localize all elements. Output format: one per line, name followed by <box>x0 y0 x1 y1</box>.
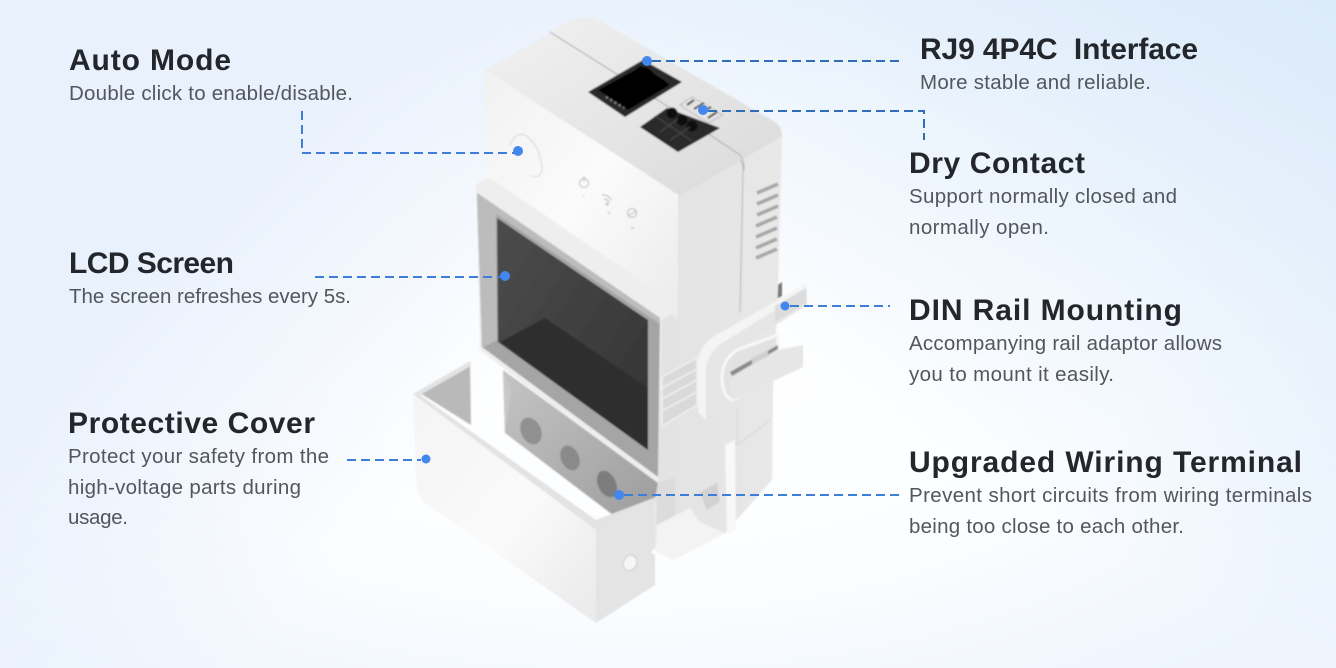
callout: Protective Cover <box>68 407 430 529</box>
rear rail tabs <box>775 282 782 300</box>
callout: Dry Contact: Dry Contact <box>909 147 1085 180</box>
screen frame <box>476 178 678 488</box>
callout: RJ9 4P4C Interface: RJ9 4P4C Interface <box>920 33 1198 66</box>
callout: Upgraded Wiring Terminal: Prevent short circuits from wiring terminals <box>909 484 1312 507</box>
front face <box>485 70 678 320</box>
callout: LCD Screen: LCD Screen <box>69 247 234 280</box>
callout: Auto Mode: Double click to enable/disable. <box>69 82 353 105</box>
callout: DIN Rail Mounting: you to mount it easily. <box>909 363 1114 386</box>
right side and lower body <box>655 130 782 560</box>
callout: LCD Screen: The screen refreshes every 5s. <box>69 285 351 308</box>
callout: Auto Mode: Auto Mode <box>69 44 231 77</box>
vents <box>756 184 778 258</box>
protective cover <box>420 364 471 425</box>
indicator icons <box>580 176 636 228</box>
callout: Upgraded Wiring Terminal <box>614 446 1312 538</box>
callout: Protective Cover: usage. <box>68 506 128 529</box>
callout: RJ9 4P4C Interface <box>642 33 1198 94</box>
callout: Dry Contact: normally open. <box>909 216 1049 239</box>
callout: LCD Screen <box>69 247 510 308</box>
LCD screen <box>497 218 648 450</box>
side ribs <box>662 358 697 426</box>
rail clip <box>698 283 807 420</box>
callout: DIN Rail Mounting <box>780 294 1222 386</box>
callout: RJ9 4P4C Interface: More stable and reliable. <box>920 71 1151 94</box>
callout: Auto Mode <box>69 44 523 156</box>
callout: Upgraded Wiring Terminal: Upgraded Wiring Terminal <box>909 446 1302 479</box>
dry contact terminal <box>640 108 720 152</box>
callout: DIN Rail Mounting: DIN Rail Mounting <box>909 294 1182 327</box>
wiring terminal <box>503 370 658 515</box>
callout: Protective Cover: Protective Cover <box>68 407 315 440</box>
top face <box>485 17 782 196</box>
lower body detail <box>725 440 736 534</box>
callout: Upgraded Wiring Terminal: being too close to each other. <box>909 515 1184 538</box>
callout: Protective Cover: Protect your safety from the <box>68 445 329 468</box>
callout: Dry Contact <box>698 105 1177 239</box>
RJ9 port <box>588 60 682 117</box>
callout: DIN Rail Mounting: Accompanying rail adaptor allows <box>909 332 1222 355</box>
button <box>510 134 542 177</box>
device illustration <box>413 17 807 623</box>
callout: Protective Cover: high-voltage parts during <box>68 476 301 499</box>
callout: Dry Contact: Support normally closed and <box>909 185 1177 208</box>
